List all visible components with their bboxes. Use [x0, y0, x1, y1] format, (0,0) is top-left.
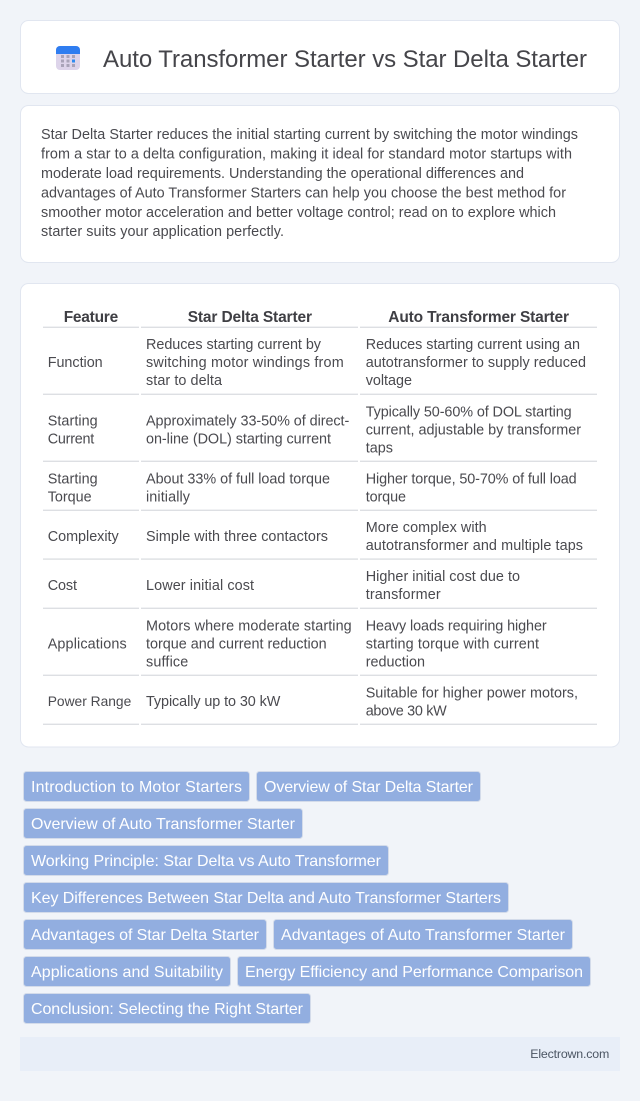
row: Applications: torque and current reduction [146, 637, 327, 653]
row: Applications: Motors where moderate starting [146, 619, 352, 635]
row: Cost [43, 569, 597, 609]
tag: Introduction to Motor Starters: Introduction to Motor Starters [31, 779, 242, 796]
row: Starting Current: Typically 50-60% of DOL starting [366, 404, 572, 420]
tag: Applications and Suitability [24, 956, 230, 986]
tag: Conclusion: Conclusion: Selecting the Right Starter [31, 1001, 304, 1018]
title: Auto Transformer Starter vs Star Delta Starter [103, 46, 587, 73]
row: Power Range: Typically up to 30 kW [146, 694, 281, 710]
table header row: Star Delta Starter [188, 309, 312, 326]
tag: Energy Efficiency [238, 956, 590, 986]
row: Function: star to delta [146, 373, 222, 389]
tag: Key Differences: Key Differences Between Star Delta and Auto Transformer Starters [31, 890, 501, 907]
tag: Advantages of Auto Transformer Starter [274, 920, 572, 950]
table header row [43, 309, 597, 328]
row: Function: autotransformer to supply reduced [366, 355, 586, 371]
tag: Advantages of Auto Transformer Starter: Advantages of Auto Transformer Starter [281, 927, 566, 944]
row: Cost: Cost [48, 578, 77, 594]
tag: Introduction to Motor Starters [24, 772, 250, 802]
intro text: moderate load requirements. Understanding the operational differences and [41, 166, 524, 182]
tag: Advantages of Star Delta Starter [24, 920, 266, 950]
row: Applications: suffice [146, 655, 188, 671]
row: Complexity: autotransformer and multiple taps [366, 538, 583, 554]
panel: comparison table [20, 284, 620, 747]
tag: Overview of Star Delta Starter [256, 772, 480, 802]
intro text: from a star to a delta configuration, making it ideal for standard motor startups with [41, 146, 572, 162]
row: Starting Current: on-line (DOL) starting current [146, 432, 331, 448]
row: Power Range [43, 685, 597, 725]
table header row: Auto Transformer Starter [388, 309, 569, 326]
tag: Working Principle: Working Principle: Star Delta vs Auto Transformer [31, 853, 382, 870]
row: Function: Reduces starting current by [146, 337, 322, 353]
row: Cost: transformer [366, 587, 441, 603]
table header row: Feature [64, 309, 119, 326]
intro text [41, 127, 578, 240]
row: Starting Torque: Torque [48, 489, 92, 505]
row: Power Range: Suitable for higher power motors, [366, 685, 578, 701]
tag: Applications and Suitability: Applications and Suitability [31, 964, 223, 981]
row: Power Range: above 30 kW [366, 703, 447, 719]
icon: calendar grid [56, 46, 80, 70]
row: Function: voltage [366, 373, 412, 389]
footer credit: Electrown.com [530, 1047, 609, 1061]
row: Starting Torque: initially [146, 489, 191, 505]
row: Applications [43, 619, 597, 676]
header panel [20, 20, 620, 94]
row: Starting Torque [43, 471, 597, 511]
row: Starting Current: Current [48, 432, 94, 448]
tag: Working Principle [24, 846, 388, 876]
tag: Key Differences [24, 882, 508, 912]
intro text: starter suits your application perfectly. [41, 224, 284, 240]
tag: Conclusion [24, 994, 310, 1024]
row: Complexity: Simple with three contactors [146, 529, 328, 545]
row: Applications: reduction [366, 655, 425, 671]
row: Starting Torque: Higher torque, 50-70% of full load [366, 471, 577, 487]
panel: introduction [20, 106, 620, 262]
row: Starting Torque: torque [366, 489, 406, 505]
row: Cost: Higher initial cost due to [366, 569, 520, 585]
row: Starting Current: Starting [48, 414, 98, 430]
topic tags [24, 772, 590, 1024]
row: Complexity: More complex with [366, 520, 487, 536]
row: Applications: starting torque with current [366, 637, 539, 653]
row: Starting Current: Approximately 33-50% of direct- [146, 414, 350, 430]
row: Starting Torque: About 33% of full load torque [146, 471, 330, 487]
tag: Energy Efficiency: Energy Efficiency and Performance Comparison [245, 964, 583, 981]
row: Complexity: Complexity [48, 529, 119, 545]
tag: Advantages of Star Delta Starter: Advantages of Star Delta Starter [31, 927, 260, 944]
row: Cost: Lower initial cost [146, 578, 254, 594]
tag: Overview of Star Delta Starter: Overview of Star Delta Starter [264, 779, 474, 796]
footer [20, 1037, 620, 1071]
row: Complexity [43, 520, 597, 560]
row: Power Range: Power Range [48, 694, 132, 709]
row: Starting Current: current, adjustable by transformer [366, 422, 581, 438]
row: Applications: Heavy loads requiring higher [366, 619, 547, 635]
intro text: smoother motor acceleration and better voltage control; read on to explore which [41, 205, 556, 221]
row: Applications: Applications [48, 637, 127, 653]
row: Starting Current [43, 404, 597, 462]
row: Function: Reduces starting current using an [366, 337, 580, 353]
intro text: advantages of Auto Transformer Starters can help you choose the best method for [41, 185, 566, 201]
intro text: Star Delta Starter reduces the initial starting current by switching the motor windings [41, 127, 578, 143]
row: Starting Current: taps [366, 440, 393, 456]
row: Function [43, 337, 597, 395]
row: Starting Torque: Starting [48, 471, 98, 487]
row: Function: Function [48, 355, 103, 371]
tag: Overview of Auto Transformer Starter [24, 808, 302, 838]
row: Function: switching motor windings from [146, 355, 344, 371]
tag: Overview of Auto Transformer Starter: Overview of Auto Transformer Starter [31, 816, 296, 833]
